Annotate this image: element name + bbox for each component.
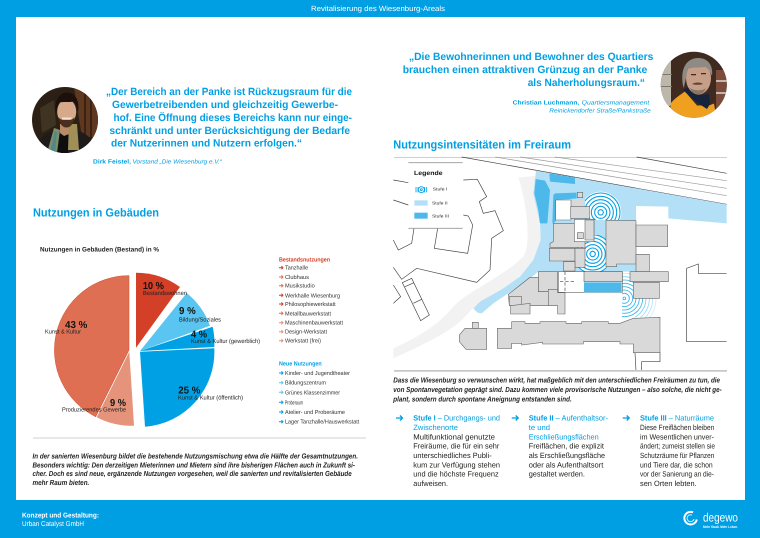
legend list: Neue Nutzungen: Kinder- und Jugendtheater	[285, 370, 350, 377]
pie label: 43 %: 43 %	[65, 320, 87, 331]
footer credit: Konzept und Gestaltung:	[22, 512, 99, 520]
quote: Christian Luchmann: brauchen einen attraktiven Grünzug an der Panke	[403, 64, 647, 76]
legend list: Bestandsnutzungen: Tanzhalle	[285, 265, 308, 272]
footer credit	[22, 512, 99, 528]
column: Stufe III: sen Orten lebten.	[640, 479, 697, 488]
text block: Nutzungsmischung: mehr Raum bieten.	[32, 478, 89, 487]
legend list: Neue Nutzungen: Atelier- und Proberäume	[285, 409, 345, 416]
chart title: Nutzungen in Gebäuden (Bestand) in %	[40, 247, 159, 254]
map: Stufe I rings	[573, 192, 656, 330]
pie label: 25 %: Kunst & Kultur (öffentlich)	[178, 395, 243, 402]
logo: degewo: Mehr Stadt. Mehr Leben.	[703, 525, 738, 529]
pie label: 25 %: 25 %	[178, 385, 200, 396]
map legend: Stufe III	[432, 213, 449, 218]
column: Stufe II: als Erschließungsfläche	[529, 451, 605, 460]
pie label: 4 %	[191, 329, 260, 345]
pie label: 9 % Gewerbe	[62, 398, 127, 414]
text block: Nutzungsmischung: cher. Doch es sind neue, ergänzende Nutzungen vorgesehen, weil die sanierten und revitalisierten Gebäude	[32, 469, 352, 478]
pie label: 10 %	[143, 281, 187, 297]
quote: Christian Luchmann: „Die Bewohnerinnen und Bewohner des Quartiers	[409, 51, 653, 63]
quote attribution: Dirk Feistel: Dirk Feistel,	[93, 158, 131, 166]
column: Stufe III: vor der Sanierung an die-	[640, 470, 714, 479]
text block: Nutzungsmischung: In der sanierten Wiesenburg bildet die bestehende Nutzungsmischung etwa die Hälfte der Gesamtnutzungen.	[32, 451, 358, 460]
quote: Dirk Feistel: Gewerbetreibenden und gleichzeitig Gewerbe-	[112, 99, 338, 111]
logo: degewo	[684, 511, 738, 529]
column: Stufe I: Multifunktional genutzte	[413, 432, 495, 441]
site map	[393, 157, 727, 371]
map legend: Stufe II	[432, 200, 448, 205]
column: Stufe I: und die höchste Frequenz	[413, 470, 499, 479]
legend list: Bestandsnutzungen	[279, 257, 343, 345]
arrow: Stufe I	[396, 416, 402, 420]
pie label: 25 %	[178, 385, 243, 402]
legend list: Bestandsnutzungen: Design-Werkstatt	[285, 329, 327, 336]
column: Stufe III: Stufe III – Naturräume	[640, 413, 714, 422]
pie label: 9 % Bildung	[179, 306, 221, 324]
legend list: Bestandsnutzungen: Philosophiewerkstatt	[285, 301, 336, 308]
legend list: Neue Nutzungen: Bildungszentrum	[285, 380, 326, 387]
quote: Dirk Feistel: „Der Bereich an der Panke ist Rückzugsraum für die	[106, 86, 352, 98]
quote: Christian Luchmann: als Naherholungsraum.“	[528, 77, 645, 89]
text block: Nutzungsmischung: Besonders wichtig: Den derzeitigen Mieterinnen und Mietern sind ihre bisherigen Flächen auch in Zukunft si-	[32, 460, 355, 469]
text block: Freiräume	[392, 376, 722, 403]
map legend	[414, 169, 449, 219]
column: Stufe III: Schutzräume für Pflanzen	[640, 451, 714, 460]
column: Stufe II: Erschließungsflächen	[529, 432, 599, 441]
legend list: Bestandsnutzungen: Werkstatt (frei)	[285, 338, 321, 345]
legend list: Bestandsnutzungen: Metallbauwerkstatt	[285, 310, 331, 317]
column: Stufe II	[512, 413, 608, 479]
portrait: Christian Luchmann	[660, 51, 728, 122]
quote: Dirk Feistel	[106, 86, 352, 150]
column: Stufe II: Freiflächen, die explizit	[529, 442, 605, 451]
legend list: Bestandsnutzungen: Maschinenbauwerkstatt	[285, 320, 343, 327]
arrow: Stufe III	[623, 416, 629, 420]
legend list: Bestandsnutzungen: Bestandsnutzungen	[279, 257, 330, 264]
legend list: Neue Nutzungen: Grünes Klassenzimmer	[285, 389, 340, 396]
column: Stufe III: ändert; zumeist stellen sie	[640, 442, 715, 451]
text block: Freiräume: plant, sondern durch spontane Aneignung entstanden sind.	[392, 394, 572, 403]
column: Stufe I: kum zur Verfügung stehen	[413, 460, 500, 469]
map legend: Stufe I	[433, 187, 447, 192]
column: Stufe I: Zwischenorte	[413, 423, 458, 432]
map: neighbouring building outlines	[393, 179, 727, 371]
logo: degewo: degewo	[703, 511, 738, 525]
quote: Christian Luchmann	[403, 51, 653, 89]
pie label: 9 % Gewerbe: 9 %	[110, 398, 126, 409]
legend list: Bestandsnutzungen: Werkhalle Wiesenburg	[285, 292, 340, 299]
map: Stufe III areas	[534, 173, 577, 223]
portrait: Dirk Feistel	[32, 87, 98, 153]
quote attribution: Christian Luchmann: Reinickendorfer Straße/Pankstraße	[549, 108, 651, 115]
pie label: 9 % Bildung: 9 %	[179, 306, 196, 317]
text block: Nutzungsmischung	[32, 451, 358, 487]
column: Stufe II: gestaltet werden.	[529, 470, 585, 479]
column: Stufe I: Stufe I – Durchgangs- und	[413, 413, 500, 422]
legend list: Neue Nutzungen: Lager Tanzhalle/Hauswerkstatt	[285, 419, 360, 426]
column: Stufe I: unterschiedliches Publi-	[413, 451, 492, 460]
quote: Dirk Feistel: hof. Eine Öffnung dieses Bereichs kann nur einge-	[114, 112, 352, 124]
quote attribution: Dirk Feistel: Vorstand „Die Wiesenburg e.V.“	[132, 158, 223, 166]
column: Stufe II: Stufe II – Aufenthaltsor-	[529, 413, 608, 422]
heading: Nutzungsintensitäten im Freiraum: Nutzungsintensitäten im Freiraum	[393, 137, 571, 151]
pie label: 10 %: Bestandswohnen	[143, 290, 187, 297]
quote attribution: Dirk Feistel	[93, 158, 223, 166]
title: Revitalisierung des Wiesenburg-Areals	[311, 4, 445, 13]
heading: Nutzungen in Gebäuden: Nutzungen in Gebäuden	[33, 206, 159, 220]
quote attribution: Christian Luchmann	[513, 99, 651, 115]
pie chart	[45, 273, 260, 427]
legend list: Neue Nutzungen: Neue Nutzungen	[279, 361, 322, 368]
column: Stufe III	[623, 413, 715, 488]
map: buildings	[459, 192, 668, 353]
legend list: Neue Nutzungen	[279, 361, 360, 426]
pie label: 9 % Bildung: Bildung/Soziales	[179, 317, 221, 324]
map: Stufe II areas	[473, 171, 727, 313]
quote: Dirk Feistel: schränkt und unter Berücksichtigung der Bedarfe	[110, 125, 350, 137]
footer credit: Urban Catalyst GmbH	[22, 520, 84, 528]
quote attribution: Christian Luchmann: Christian Luchmann,	[513, 99, 580, 106]
arrow: Stufe II	[512, 416, 518, 420]
pie label: 9 % Gewerbe: Produzierendes Gewerbe	[62, 407, 127, 414]
pie label: 10 %: 10 %	[143, 281, 164, 292]
pie label: 4 %: Kunst & Kultur (gewerblich)	[191, 338, 260, 345]
column: Stufe I: aufweisen.	[413, 479, 448, 488]
legend list: Bestandsnutzungen: Clubhaus	[285, 274, 309, 281]
column: Stufe II: te und	[529, 423, 550, 432]
pie label: 4 %: 4 %	[191, 329, 207, 340]
quote: Dirk Feistel: der Nutzerinnen und Nutzern erfolgen.“	[111, 138, 302, 150]
legend list: Bestandsnutzungen: Musikstudio	[285, 283, 315, 290]
column: Stufe I	[396, 413, 500, 488]
pie label: 43 %	[45, 320, 87, 335]
column: Stufe II: oder als Aufenthaltsort	[529, 460, 604, 469]
column: Stufe III: Diese Freiflächen bleiben	[640, 423, 714, 432]
column: Stufe I: Freiräume, die für ein sehr	[413, 442, 500, 451]
column: Stufe III: im Wesentlichen unver-	[640, 432, 714, 441]
legend list: Neue Nutzungen: Proberaum	[285, 399, 303, 406]
column: Stufe III: und Tiere dar, die schon	[640, 460, 713, 469]
quote attribution: Christian Luchmann: Quartiersmanagement	[582, 99, 650, 106]
map legend: Legende	[414, 169, 443, 176]
pie label: 43 %: Kunst & Kultur	[45, 328, 81, 335]
